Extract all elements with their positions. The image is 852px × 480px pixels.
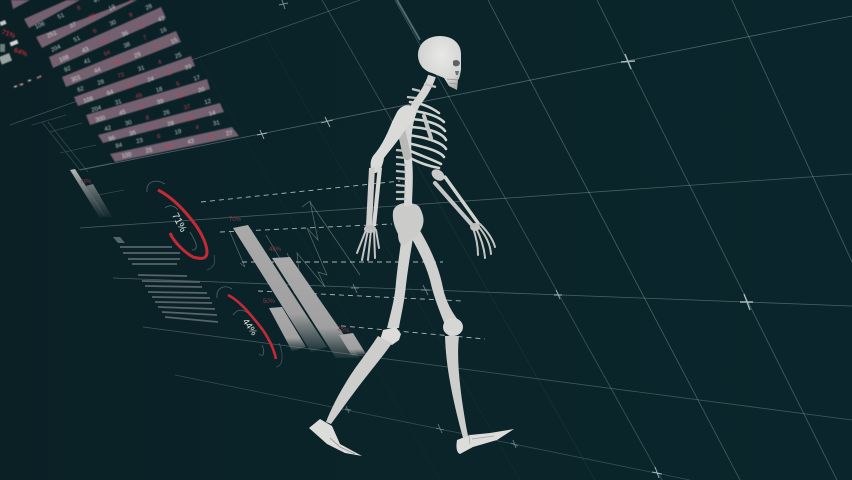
- table numbers: [34, 0, 234, 160]
- small bar chart upper left: 60%: [81, 179, 92, 185]
- bar chart labels: 15%: [337, 326, 350, 335]
- bar chart labels: 50%: [263, 299, 276, 305]
- text block with placeholder lines: [113, 237, 218, 322]
- pelvis: [393, 203, 424, 245]
- table numbers: 301 44 58 29 6 15: [71, 37, 179, 84]
- small corner readouts: 71%: [1, 29, 17, 40]
- table numbers: 62 28 73 31 4 25: [77, 52, 183, 94]
- table numbers: 204 51 6 30 9 28: [50, 3, 154, 54]
- gauge: 44 percent: 44%: [241, 317, 259, 337]
- table numbers: 108 43 71 36 5 42: [59, 16, 167, 64]
- table numbers: 84 23 6 19 4 31: [115, 120, 221, 150]
- table numbers: 204 31 49 18 6 17: [91, 75, 202, 114]
- small bar chart upper left: [32, 115, 124, 218]
- small corner readouts: 64%: [13, 47, 29, 59]
- table numbers: 96 35 7 28 51 14: [108, 110, 217, 143]
- dashed guide lines: [201, 181, 485, 339]
- near arm: [357, 105, 415, 260]
- far arm: [429, 167, 495, 258]
- gauge: 44 percent: [217, 287, 282, 367]
- table numbers: 300 45 6 39 52 20: [95, 87, 206, 124]
- bar chart labels: [229, 217, 350, 335]
- red gauge arc: [158, 190, 207, 258]
- table row bars: [11, 0, 239, 162]
- skeleton figure: [309, 36, 514, 456]
- skull: [418, 36, 461, 90]
- table numbers: 92 41 64 38 7 16: [64, 27, 168, 74]
- big bar chart: [229, 217, 366, 358]
- table numbers: 42 30 8 26 37 12: [104, 98, 212, 133]
- line chart zigzags: [230, 201, 360, 295]
- table numbers: 100 25 61 43 8 27: [121, 130, 234, 160]
- rib cage: [400, 102, 446, 168]
- front leg: [408, 224, 514, 454]
- gauge: 71 percent: [147, 181, 215, 270]
- spine: [396, 76, 436, 206]
- gauge: 71 percent: 71%: [169, 211, 188, 234]
- data table panel: [11, 0, 239, 162]
- small corner readouts: [0, 20, 41, 87]
- table numbers: 108 64 57 24 8 33: [83, 64, 193, 105]
- grid cross markers: [257, 0, 753, 478]
- bar chart labels: 48%: [269, 247, 282, 253]
- bar chart labels: 70%: [229, 217, 242, 223]
- rear leg: [309, 225, 414, 456]
- red gauge arc: [228, 295, 276, 359]
